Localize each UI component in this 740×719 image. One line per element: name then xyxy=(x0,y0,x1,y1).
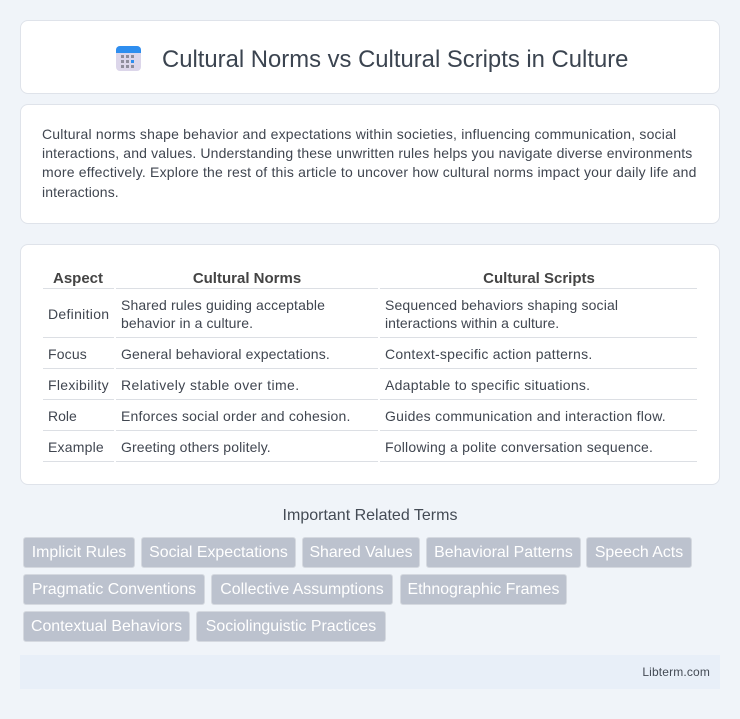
row: flexibility: Flexibility xyxy=(48,377,109,393)
footer xyxy=(20,655,720,689)
intro text xyxy=(42,126,697,200)
header row xyxy=(53,270,595,287)
row: definition: Definition xyxy=(48,306,109,322)
row: focus: Context-specific action patterns. xyxy=(385,346,592,362)
tag: Collective Assumptions xyxy=(220,581,384,598)
tag xyxy=(141,537,296,568)
row: focus: Focus xyxy=(48,346,87,362)
row: role: Enforces social order and cohesion. xyxy=(121,408,351,424)
row: focus: General behavioral expectations. xyxy=(121,346,330,362)
tag xyxy=(400,574,567,605)
row: role: Role xyxy=(48,408,77,424)
tag xyxy=(302,537,420,568)
tag xyxy=(23,574,205,605)
related terms tags xyxy=(23,537,692,642)
related terms heading: Important Related Terms xyxy=(283,507,457,524)
table card xyxy=(20,244,720,485)
tag: Ethnographic Frames xyxy=(408,581,559,598)
tag: Shared Values xyxy=(309,544,413,561)
tag: Implicit Rules xyxy=(32,544,126,561)
intro text: more effectively. Explore the rest of this article to uncover how cultural norms impact your daily life and xyxy=(42,164,697,180)
header row: Cultural Norms xyxy=(193,270,301,287)
row: definition: behavior in a culture. xyxy=(121,315,253,331)
header row: Aspect xyxy=(53,270,103,287)
intro text: interactions, and values. Understanding these unwritten rules helps you navigate diverse environments xyxy=(42,145,692,161)
intro card xyxy=(20,104,720,224)
tag xyxy=(211,574,393,605)
row: example xyxy=(48,439,653,455)
intro text: Cultural norms shape behavior and expectations within societies, influencing communication, social xyxy=(42,126,676,142)
row: focus xyxy=(48,346,592,362)
row: flexibility xyxy=(48,377,590,393)
comparison table xyxy=(43,270,697,462)
intro text: interactions. xyxy=(42,184,119,200)
row: role xyxy=(48,408,666,424)
row: definition: Shared rules guiding acceptable xyxy=(121,297,325,313)
tag: Behavioral Patterns xyxy=(434,544,573,561)
icon: calendar xyxy=(116,46,141,71)
tag xyxy=(196,611,386,642)
row: definition xyxy=(48,297,618,331)
tag: Social Expectations xyxy=(149,544,288,561)
tag xyxy=(426,537,581,568)
header row: Cultural Scripts xyxy=(483,270,595,287)
tag xyxy=(23,611,190,642)
row: flexibility: Relatively stable over time. xyxy=(121,377,300,393)
title: Cultural Norms vs Cultural Scripts in Culture xyxy=(162,46,628,73)
row: example: Greeting others politely. xyxy=(121,439,271,455)
row: definition: Sequenced behaviors shaping social xyxy=(385,297,618,313)
footer credit: Libterm.com xyxy=(642,665,710,679)
tag xyxy=(586,537,692,568)
tag: Pragmatic Conventions xyxy=(32,581,196,598)
row: definition: interactions within a culture. xyxy=(385,315,559,331)
header card xyxy=(20,20,720,94)
row: example: Example xyxy=(48,439,104,455)
tag xyxy=(23,537,135,568)
tag: Contextual Behaviors xyxy=(31,618,182,635)
tag: Sociolinguistic Practices xyxy=(206,618,376,635)
row: flexibility: Adaptable to specific situations. xyxy=(385,377,590,393)
row: example: Following a polite conversation sequence. xyxy=(385,439,653,455)
tag: Speech Acts xyxy=(595,544,683,561)
row: role: Guides communication and interaction flow. xyxy=(385,408,666,424)
